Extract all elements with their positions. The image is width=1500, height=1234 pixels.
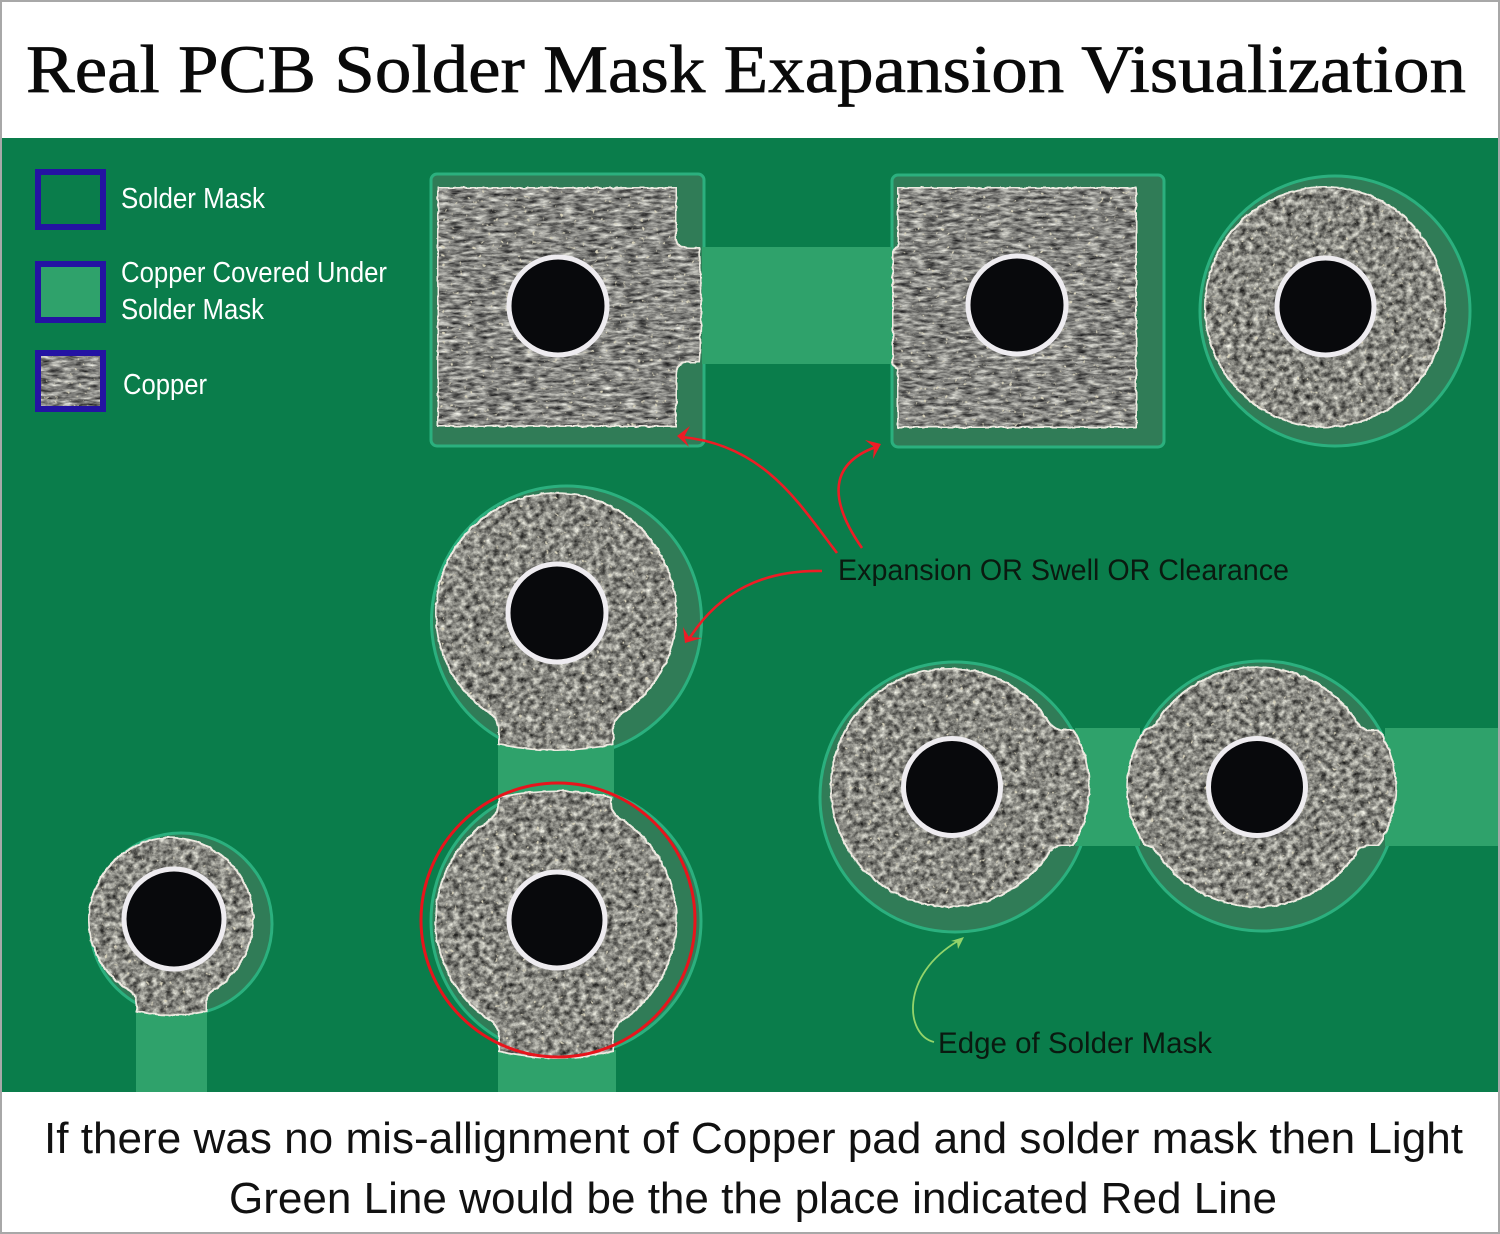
- copper pad right pair 2: [1126, 666, 1397, 908]
- copper pad right pair 1: [830, 667, 1090, 908]
- mask openings: [90, 174, 1470, 1056]
- legend swatch: covered copper: [38, 264, 103, 320]
- callout: expansion: Expansion OR Swell OR Clearance: [838, 554, 1289, 587]
- caption line 2: Green Line would be the the place indicated Red Line: [229, 1174, 1277, 1223]
- copper round pad circled: [435, 790, 677, 1059]
- legend label: copper: Copper: [123, 369, 207, 401]
- traces: copper covered under solder mask: [136, 247, 1498, 1092]
- copper square pad middle: [892, 187, 1137, 428]
- legend swatch: solder mask: [38, 172, 103, 227]
- copper round pad top right: [1204, 186, 1446, 428]
- arrow: to square pad left: [677, 426, 837, 553]
- arrow: edge of solder mask: [913, 937, 964, 1042]
- legend label: copper covered: Copper Covered Under: [121, 257, 387, 289]
- caption line 1: If there was no mis-allignment of Copper pad and solder mask then Light: [44, 1114, 1463, 1163]
- legend: [38, 172, 387, 409]
- title: Real PCB Solder Mask Exapansion Visualization: [26, 31, 1466, 107]
- legend label: solder mask second line: Solder Mask: [121, 294, 264, 326]
- copper round pad lower left: [88, 837, 254, 1016]
- red circle highlight: [421, 783, 695, 1057]
- copper square pad left: [437, 187, 702, 427]
- legend swatch: copper: [38, 353, 103, 409]
- arrow: to round pad: [683, 571, 822, 643]
- arrow: to square pad middle: [839, 440, 881, 548]
- copper pads: [88, 186, 1446, 1059]
- copper round pad centre: [435, 492, 677, 751]
- panel: PCB board photo: [2, 138, 1498, 1092]
- drill holes: [124, 256, 1374, 969]
- legend label: solder mask: Solder Mask: [121, 183, 265, 215]
- callout: edge of solder mask: Edge of Solder Mask: [938, 1027, 1213, 1060]
